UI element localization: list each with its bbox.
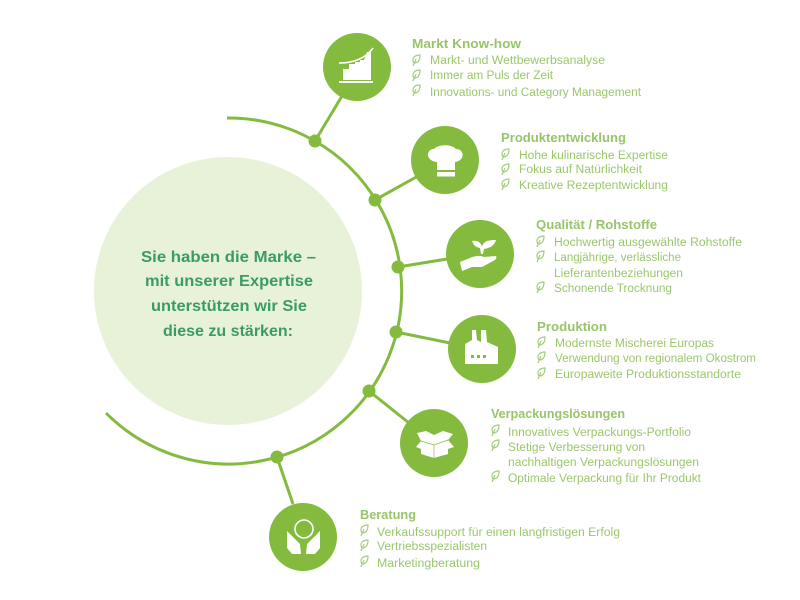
icon: open box (400, 409, 468, 477)
text block: Qualität / Rohstoffe: Qualität / Rohstoffe (536, 217, 657, 232)
central disc with message (94, 157, 362, 425)
text block: Markt Know-how: Innovations- und Category Management (430, 87, 642, 99)
text block: Qualität / Rohstoffe: Schonende Trocknung (554, 283, 672, 295)
text block: Produktentwicklung (501, 130, 668, 192)
central disc with message: mit unserer Expertise (145, 273, 313, 290)
icon: market chart (323, 33, 391, 101)
icon: chef hat (411, 126, 479, 194)
text block: Produktentwicklung: Produktentwicklung (501, 130, 626, 145)
text block: Beratung: Beratung (360, 507, 416, 522)
text block: Beratung: Vertriebsspezialisten (377, 541, 487, 553)
icon: factory (448, 315, 516, 383)
icon: hand with plant (446, 220, 514, 288)
text block: Verpackungslösungen: Verpackungslösungen (491, 406, 625, 421)
text block: Verpackungslösungen: Stetige Verbesserung von (508, 442, 645, 454)
text block: Verpackungslösungen (491, 406, 702, 485)
text block: Produktentwicklung: Fokus auf Natürlichkeit (519, 164, 643, 176)
text block: Beratung (360, 507, 620, 570)
text block: Beratung: Marketingberatung (377, 558, 480, 570)
main arc (106, 118, 402, 464)
text block: Markt Know-how (412, 36, 642, 99)
icon: hands with speech bubble (269, 503, 337, 571)
text block: Produktion: Modernste Mischerei Europas (555, 338, 714, 350)
central disc with message: unterstützen wir Sie (151, 298, 307, 315)
text block: Verpackungslösungen: nachhaltigen Verpackungslösungen (508, 457, 699, 469)
text block: Produktentwicklung: Kreative Rezeptentwicklung (519, 180, 668, 192)
text block: Qualität / Rohstoffe: Langjährige, verlässliche (554, 252, 681, 264)
text block: Markt Know-how: Markt- und Wettbewerbsanalyse (430, 55, 605, 67)
text block: Produktion (537, 319, 756, 381)
text block: Markt Know-how: Markt Know-how (412, 36, 522, 51)
text block: Markt Know-how: Immer am Puls der Zeit (430, 70, 554, 82)
central disc with message: diese zu stärken: (163, 323, 293, 340)
connector lines (277, 96, 450, 504)
central disc with message: Sie haben die Marke – (141, 249, 316, 266)
text block: Qualität / Rohstoffe (536, 217, 742, 295)
text block: Produktion: Verwendung von regionalem Ökostrom (555, 353, 756, 365)
text block: Beratung: Verkaufssupport für einen langfristigen Erfolg (377, 527, 620, 539)
text block: Qualität / Rohstoffe: Hochwertig ausgewählte Rohstoffe (554, 237, 742, 249)
text block: Verpackungslösungen: Innovatives Verpackungs-Portfolio (508, 427, 691, 439)
text block: Verpackungslösungen: Optimale Verpackung für Ihr Produkt (508, 473, 702, 485)
text block: Produktentwicklung: Hohe kulinarische Expertise (519, 150, 668, 162)
text block: Qualität / Rohstoffe: Lieferantenbeziehungen (554, 268, 683, 280)
arc nodes (270, 134, 404, 464)
text block: Produktion: Produktion (537, 319, 607, 334)
text block: Produktion: Europaweite Produktionsstandorte (555, 369, 741, 381)
